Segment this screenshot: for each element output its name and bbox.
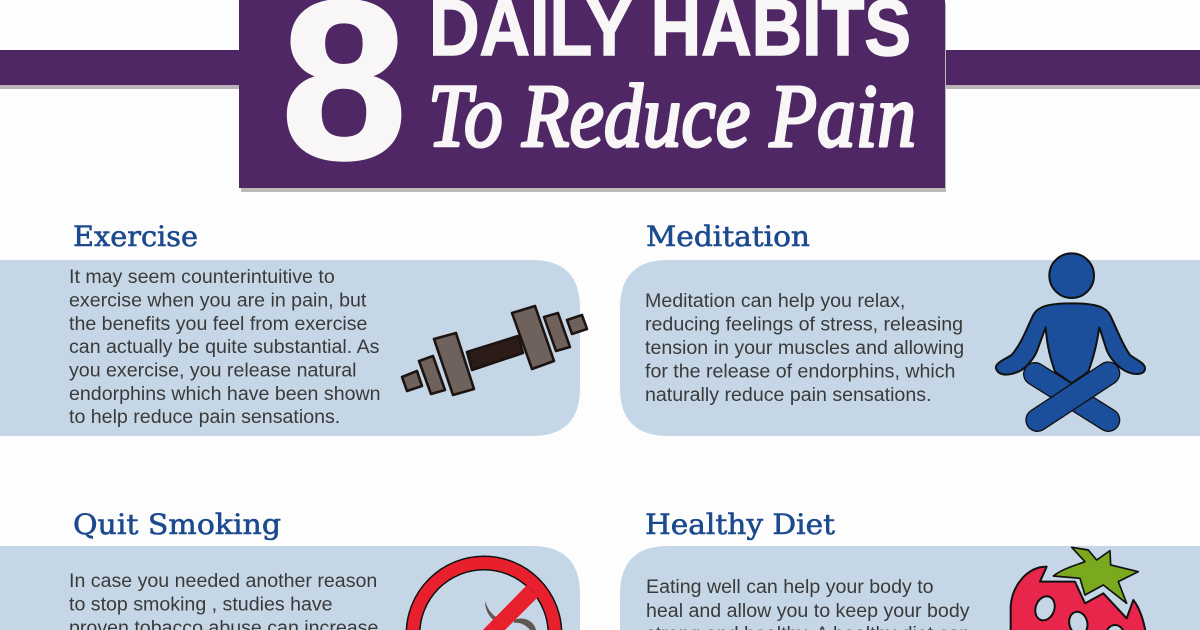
text block: exercise: exercise when you are in pain, but: [69, 290, 367, 312]
text block: quit smoking: to stop smoking , studies have: [69, 594, 333, 616]
panel: healthy diet: [620, 508, 1200, 630]
title banner: [0, 0, 1200, 206]
text block: meditation: reducing feelings of stress, releasing: [645, 314, 963, 336]
text block: exercise: It may seem counterintuitive to: [69, 266, 335, 288]
heading: exercise: Exercise: [73, 220, 198, 253]
text block: exercise: to help reduce pain sensations.: [69, 406, 340, 428]
text block: healthy diet: [646, 576, 970, 630]
panel: exercise: [0, 220, 587, 436]
text block: quit smoking: In case you needed another reason: [69, 570, 377, 592]
text block: meditation: Meditation can help you relax,: [645, 290, 905, 312]
heading: quit smoking: Quit Smoking: [73, 508, 281, 541]
panel: meditation: [620, 220, 1200, 436]
title line: To Reduce Pain: To Reduce Pain: [428, 67, 916, 166]
text block: healthy diet: Eating well can help your body to: [646, 576, 934, 598]
icon: no smoking sign: [413, 563, 555, 630]
text block: exercise: endorphins which have been shown: [69, 383, 381, 405]
text block: exercise: the benefits you feel from exercise: [69, 313, 368, 335]
text block: meditation: naturally reduce pain sensations.: [645, 384, 931, 406]
text block: exercise: [69, 266, 381, 428]
icon: dumbbell: [402, 306, 587, 395]
heading: healthy diet: Healthy Diet: [645, 508, 836, 541]
text block: meditation: for the release of endorphins, which: [645, 360, 955, 382]
text block: meditation: [645, 290, 964, 406]
text block: exercise: can actually be quite substantial. As: [69, 336, 380, 358]
icon: strawberry: [1011, 547, 1147, 630]
icon: meditating figure: [996, 253, 1145, 420]
text block: healthy diet: heal and allow you to keep your body: [646, 600, 970, 622]
text block: meditation: tension in your muscles and allowing: [645, 337, 964, 359]
text block: quit smoking: [69, 570, 378, 630]
text block: exercise: you exercise, you release natural: [69, 360, 357, 382]
panel: quit smoking: [0, 508, 580, 630]
heading: meditation: Meditation: [646, 220, 810, 253]
